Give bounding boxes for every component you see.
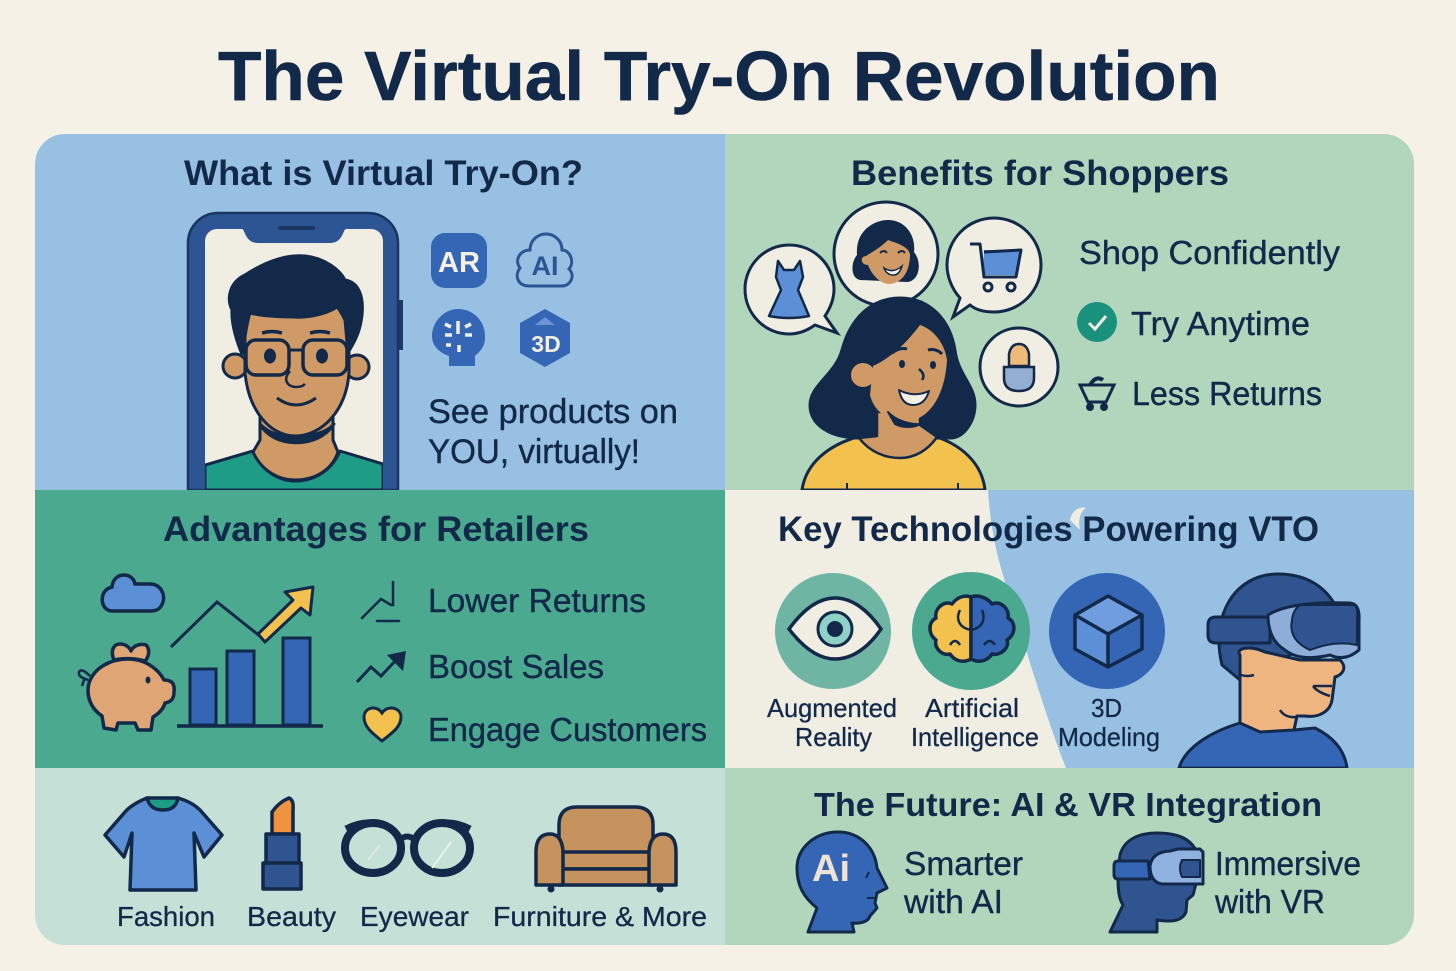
text: 3D modeling: 3D: [1091, 693, 1122, 723]
text: 3D modeling: Modeling: [1058, 722, 1160, 752]
icon: AR badge: [431, 233, 487, 288]
panel: what is virtual try-on: [35, 134, 725, 490]
text: see products: YOU, virtually!: [428, 433, 640, 471]
icon: augmented reality eye: [775, 573, 891, 689]
icon: armchair: [536, 807, 676, 892]
text: augmented reality: Reality: [795, 722, 872, 752]
heading: advantages: Advantages for Retailers: [163, 510, 589, 549]
text: see products: See products on: [428, 393, 678, 431]
text: smarter with AI: with AI: [903, 883, 1003, 920]
text: artificial intelligence: Artificial: [925, 693, 1019, 723]
icon: AI cloud: AI: [532, 251, 558, 281]
icon: smiling woman: [802, 298, 985, 490]
icon: AR badge: AR: [438, 247, 480, 279]
icon: lipstick: [263, 798, 301, 889]
icon: check: [1077, 302, 1117, 342]
icon: AI head: [797, 832, 887, 932]
heading: what is virtual try-on: What is Virtual Try-On?: [184, 154, 583, 193]
text: 3D modeling: [1060, 698, 1158, 752]
icon: brain head: [432, 309, 485, 366]
text: smarter with AI: Smarter: [904, 845, 1023, 882]
title: The Virtual Try-On Revolution: [218, 37, 1220, 115]
infographic card: [35, 134, 1414, 945]
heading: key technologies: Key Technologies Powering VTO: [778, 510, 1319, 549]
icon: t-shirt: [105, 798, 222, 890]
icon: 3D cube: [1049, 573, 1165, 689]
icon: AI cloud: [517, 234, 572, 286]
icon: VR head: [1110, 833, 1203, 932]
heading: benefits: Benefits for Shoppers: [851, 154, 1229, 193]
icon: artificial intelligence brain: [912, 572, 1030, 690]
text: smarter with AI: [903, 845, 1023, 920]
icon: piggy bank: [79, 644, 174, 730]
text: engage customers: Engage Customers: [428, 711, 707, 748]
panel: key technologies: [725, 490, 1414, 768]
text: artificial intelligence: [911, 693, 1039, 752]
panel: advantages for retailers: [35, 490, 725, 768]
icon: 3D hexagon: 3D: [531, 331, 561, 357]
text: immersive with VR: Immersive: [1215, 845, 1361, 882]
chart: bars with arrow: [171, 587, 323, 726]
text: furniture & more: Furniture & More: [493, 901, 707, 932]
icon: 3D hexagon: [520, 309, 570, 367]
icon: glasses: [345, 823, 470, 873]
icon: AI head: Ai: [812, 848, 850, 890]
icon: shopping basket: [1080, 378, 1114, 410]
text: augmented reality: [767, 693, 897, 752]
icon: phone with man: [188, 213, 403, 490]
icon: boost sales: [357, 651, 406, 682]
icon: cart bubble: [947, 218, 1041, 317]
heading: the future: The Future: AI & VR Integration: [814, 786, 1322, 823]
text: lower returns: Lower Returns: [428, 582, 646, 619]
text: immersive with VR: with VR: [1214, 883, 1325, 920]
text: artificial intelligence: Intelligence: [911, 722, 1039, 752]
text: fashion: Fashion: [117, 901, 215, 932]
text: boost sales: Boost Sales: [428, 648, 604, 685]
icon: cosmetic bubble: [980, 328, 1058, 406]
text: see products: [428, 393, 678, 471]
icon: heart: [364, 708, 401, 741]
text: shop confidently: Shop Confidently: [1079, 234, 1341, 271]
panel: benefits for shoppers: [725, 134, 1414, 490]
text: augmented reality: Augmented: [767, 693, 897, 723]
icon: smiling face bubble: [834, 202, 938, 306]
icon: cloud: [102, 575, 164, 611]
text: beauty: Beauty: [247, 901, 336, 932]
icon: dress bubble: [745, 245, 837, 334]
icon: person with VR headset: [1179, 574, 1359, 768]
panel: the future: [725, 768, 1414, 945]
panel: product categories: [35, 768, 725, 945]
text: immersive with VR: [1214, 845, 1361, 920]
text: try anytime: Try Anytime: [1131, 305, 1310, 342]
text: less returns: Less Returns: [1132, 375, 1322, 412]
text: eyewear: Eyewear: [360, 901, 469, 932]
icon: lower returns: [362, 582, 399, 621]
